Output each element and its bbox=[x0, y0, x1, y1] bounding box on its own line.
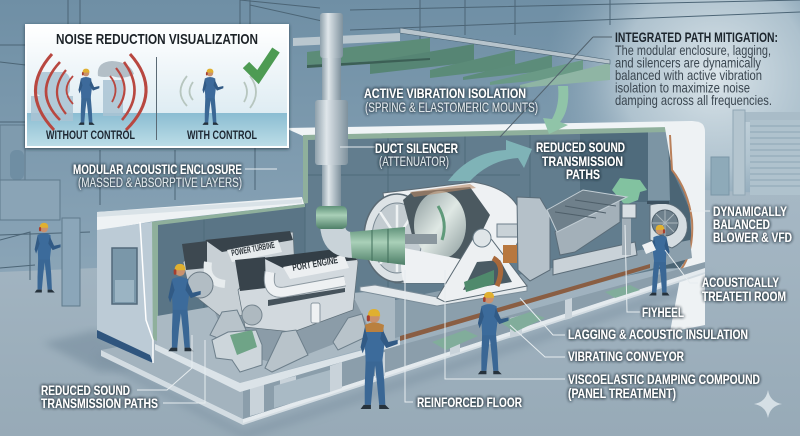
label: active vibration isolation: (SPRING & ELASTOMERIC MOUNTS) bbox=[365, 99, 538, 115]
label: reduced sound transmission paths bottom left bbox=[41, 382, 158, 411]
caption: WITH CONTROL bbox=[187, 130, 257, 142]
engine mounts bbox=[265, 314, 368, 372]
port engine bbox=[235, 247, 358, 332]
rolling door bbox=[711, 110, 800, 195]
worker with control bbox=[202, 69, 223, 125]
text block: integrated path mitigation: isolation to maximize noise bbox=[615, 80, 750, 96]
text block: integrated path mitigation: and silencers are dynamically bbox=[615, 54, 761, 70]
text block: integrated path mitigation bbox=[615, 29, 778, 108]
green check mark bbox=[246, 50, 276, 77]
label: active vibration isolation bbox=[364, 85, 538, 115]
label: reduced sound transmission paths center bbox=[536, 139, 625, 182]
label: viscoelastic damping: (PANEL TREATMENT) bbox=[568, 385, 676, 401]
label: reinforced floor: REINFORCED FLOOR bbox=[417, 394, 522, 410]
blower bbox=[647, 201, 687, 248]
worker: background left bbox=[35, 223, 61, 293]
label: duct silencer: (ATTENUATOR) bbox=[379, 153, 449, 169]
label: acoustically treated room bbox=[702, 274, 786, 304]
soft green waves bbox=[180, 76, 256, 108]
arrow: green upward path bbox=[612, 178, 647, 205]
worker: under flywheel bbox=[478, 292, 509, 374]
red noise waves bbox=[35, 54, 146, 130]
floor shadow under platform bbox=[95, 275, 715, 436]
right enclosure module bbox=[664, 122, 705, 332]
enclosure wall panels bbox=[155, 128, 692, 350]
enclosure roof and green layers bbox=[97, 121, 700, 352]
floor shadow bbox=[43, 330, 155, 372]
worker: center walking bbox=[361, 309, 398, 409]
label: modular acoustic enclosure: (MASSED & ABSORPTIVE LAYERS) bbox=[78, 174, 242, 190]
label: reduced sound transmission paths center: PATHS bbox=[566, 166, 600, 182]
title: NOISE REDUCTION VISUALIZATION bbox=[56, 31, 258, 48]
label: flywheel: FIYHEEL bbox=[642, 304, 684, 320]
power turbine engine bbox=[182, 231, 295, 316]
label: viscoelastic damping bbox=[568, 371, 760, 401]
factory floor bbox=[0, 190, 800, 436]
engine label: PORT ENGINE bbox=[292, 255, 339, 274]
enclosure back wall bbox=[155, 124, 692, 350]
panel floor bbox=[27, 113, 287, 146]
green mounts bbox=[432, 285, 640, 350]
panel: noise reduction visualization bbox=[25, 24, 289, 148]
label: reduced sound transmission paths bottom left: TRANSMISSION PATHS bbox=[41, 395, 158, 411]
conveyor support box bbox=[517, 197, 550, 281]
deck surface bbox=[157, 290, 395, 383]
label: modular acoustic enclosure: MODULAR ACOUSTIC ENCLOSURE bbox=[73, 161, 242, 177]
left enclosure module bbox=[97, 222, 153, 363]
green coupling pipe bbox=[350, 227, 405, 265]
worker: right with clipboard bbox=[642, 225, 669, 296]
platform support ribs bbox=[250, 298, 572, 416]
deck right surface bbox=[395, 240, 692, 338]
background wall bbox=[0, 0, 800, 290]
machinery behind worker bbox=[31, 61, 134, 121]
background structure bbox=[0, 0, 800, 306]
vibrating conveyor bbox=[547, 190, 637, 275]
overhead green beams bbox=[293, 28, 610, 88]
orange rail bbox=[400, 264, 650, 341]
label: dynamically balanced blower bbox=[713, 203, 792, 245]
label: reduced sound transmission paths bottom left: REDUCED SOUND bbox=[41, 382, 130, 398]
label: modular acoustic enclosure bbox=[73, 161, 242, 190]
text block: integrated path mitigation: balanced with active vibration bbox=[615, 67, 762, 83]
right module curve bbox=[670, 135, 692, 280]
flywheel housing bbox=[364, 182, 522, 283]
label: dynamically balanced blower: BALANCED bbox=[713, 216, 770, 232]
worker: at engine bbox=[168, 264, 201, 351]
leader lines bbox=[137, 37, 710, 403]
base slab bbox=[101, 268, 705, 425]
arrow: curved teal transmission path bbox=[448, 140, 532, 181]
green motor bbox=[212, 330, 262, 372]
label: reduced sound transmission paths center: TRANSMISSION bbox=[542, 153, 623, 169]
turbine mount bbox=[210, 310, 246, 342]
upper deck edge bbox=[155, 340, 400, 392]
duct and silencer bbox=[315, 13, 354, 258]
flywheel shaft bbox=[405, 234, 437, 244]
platform understructure right bbox=[243, 262, 705, 419]
engine label: POWER TURBINE bbox=[230, 240, 276, 258]
caption: WITHOUT CONTROL bbox=[46, 130, 135, 142]
label: reduced sound transmission paths center: REDUCED SOUND bbox=[536, 139, 625, 155]
deck shadow bbox=[210, 300, 370, 365]
label: vibrating conveyor: VIBRATING CONVEYOR bbox=[568, 348, 684, 364]
arrow: green downward path bbox=[543, 86, 568, 134]
background glow bbox=[500, 0, 800, 240]
panel divider bbox=[156, 57, 157, 140]
flywheel stand platform bbox=[360, 285, 527, 306]
label: active vibration isolation: ACTIVE VIBRATION ISOLATION bbox=[364, 85, 526, 101]
platform understructure bbox=[101, 340, 243, 419]
flywheel triangular stand bbox=[437, 224, 527, 302]
label: duct silencer: DUCT SILENCER bbox=[375, 140, 458, 156]
icon: sparkle bbox=[754, 390, 782, 418]
label: duct silencer bbox=[375, 140, 458, 169]
worker without control bbox=[78, 69, 99, 125]
